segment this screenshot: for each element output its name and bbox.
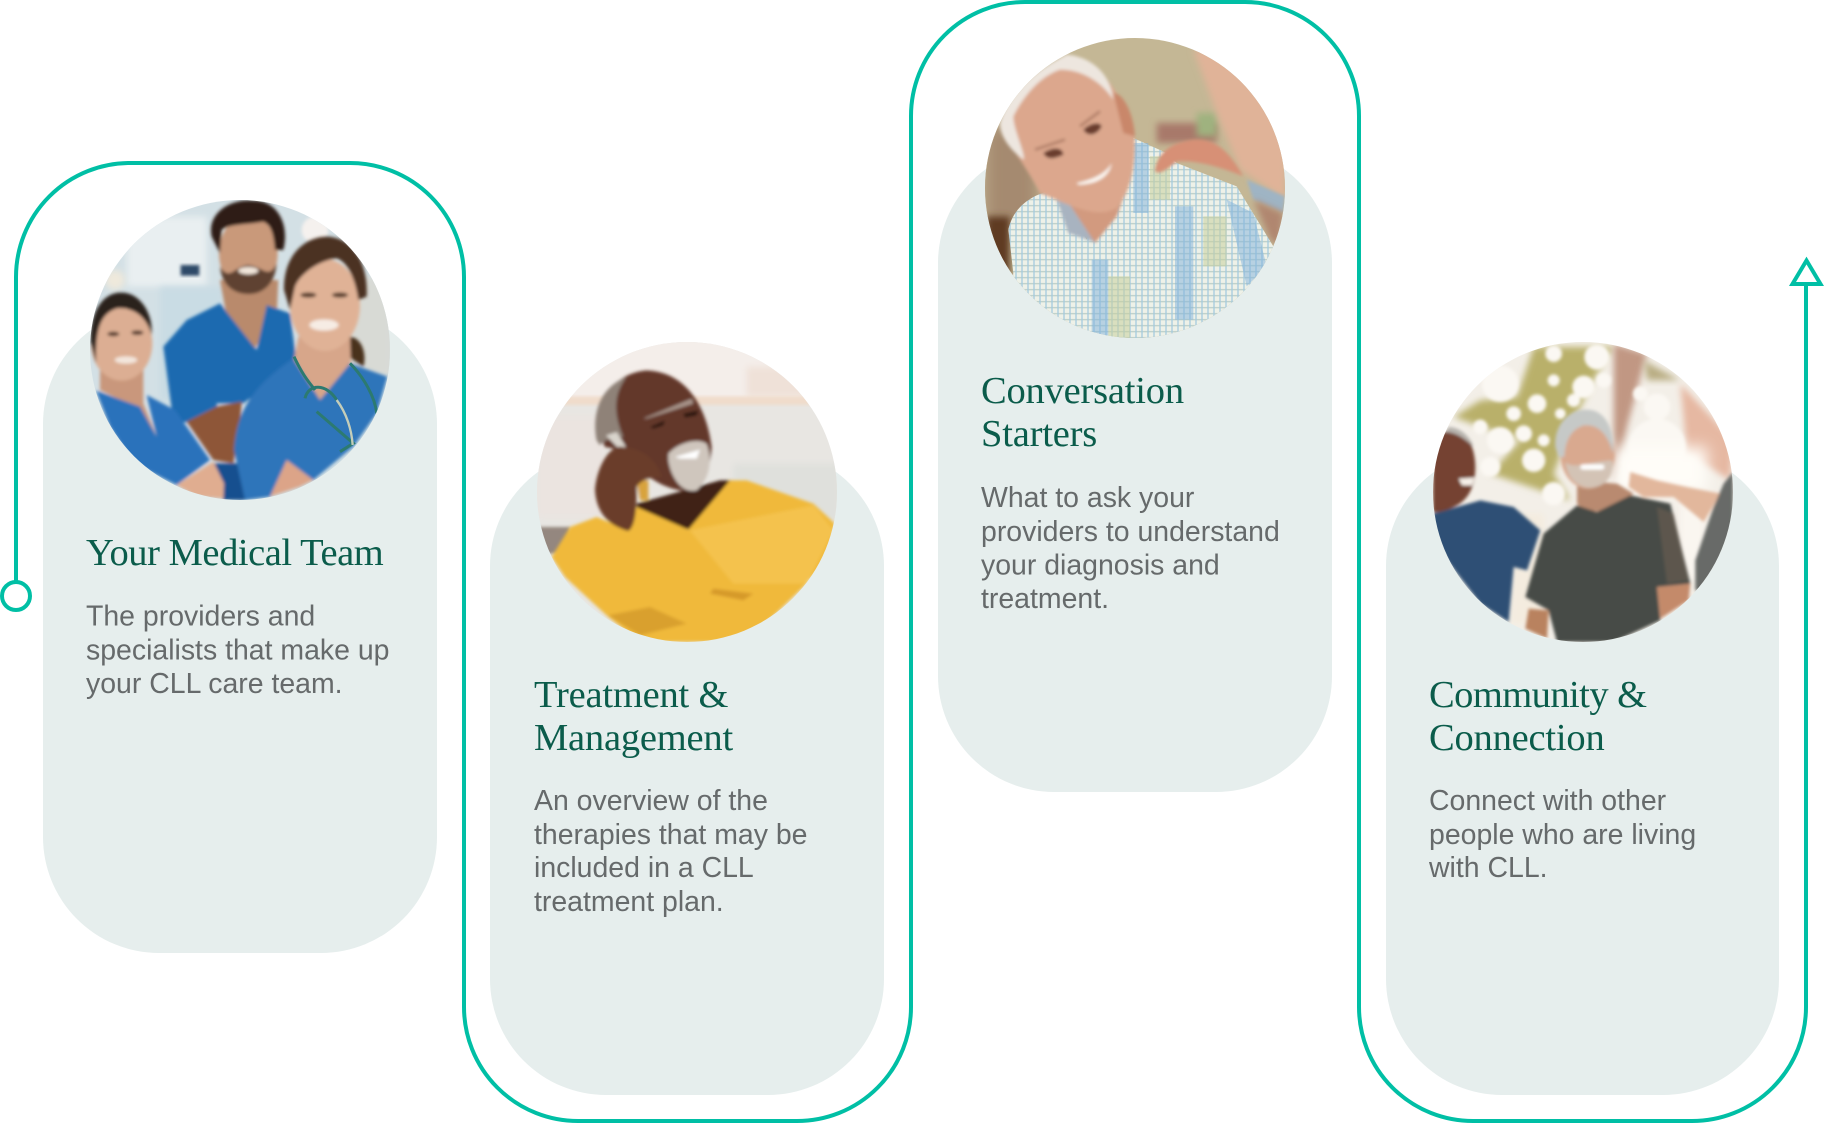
photo: older man with plaid shirt (985, 38, 1285, 338)
man back (220, 280, 278, 350)
body: medical team description: your CLL care team. (86, 668, 343, 700)
body: medical team description: The providers and (86, 600, 315, 632)
body: conversation description: providers to understand (981, 516, 1280, 548)
body: conversation description: What to ask your (981, 482, 1194, 514)
body: conversation description: treatment. (981, 583, 1109, 615)
photo: medical team (90, 200, 390, 500)
body: community description: Connect with other (1429, 785, 1666, 817)
card 1 text (86, 532, 389, 700)
right person (1695, 472, 1733, 594)
body: medical team description: specialists that make up (86, 634, 389, 666)
head (1560, 419, 1615, 489)
photo: friends outdoors (1433, 342, 1733, 642)
arrow head (1792, 260, 1820, 284)
body: treatment description: treatment plan. (534, 886, 724, 918)
panel: Conversation Starters (938, 147, 1332, 792)
body: community description: with CLL. (1428, 852, 1548, 884)
card 4 text (1428, 674, 1696, 884)
body: treatment description: included in a CLL (534, 852, 754, 884)
t-shirt (1525, 495, 1690, 642)
heading: Treatment & Management: Treatment & (534, 674, 728, 716)
card 2 text (534, 674, 807, 918)
woman right (348, 337, 365, 367)
heading: Community & Connection: Community & (1429, 674, 1647, 716)
heading: Your Medical Team: Your Medical Team (86, 532, 384, 574)
shirt (1007, 138, 1287, 343)
heading: Treatment & Management: Management (534, 717, 733, 759)
heading: Conversation Starters: Conversation (981, 370, 1184, 412)
card 3 text (981, 370, 1280, 615)
body: treatment description: An overview of the (534, 785, 768, 817)
panel: Community & Connection (1386, 450, 1779, 1095)
stethoscope (294, 357, 377, 452)
heading: Conversation Starters: Starters (981, 413, 1097, 455)
photo: man on phone (537, 342, 837, 642)
neck (1577, 480, 1634, 512)
heading: Community & Connection: Connection (1429, 717, 1604, 759)
panel: Treatment & Management (490, 450, 884, 1095)
woman left (100, 363, 157, 437)
left man (1433, 500, 1540, 622)
body: treatment description: therapies that may be (534, 819, 807, 851)
panel: Your Medical Team (43, 308, 437, 953)
hand (1629, 472, 1720, 522)
body: conversation description: your diagnosis and (981, 550, 1220, 582)
body: community description: people who are living (1429, 819, 1696, 851)
start node (2, 582, 30, 610)
